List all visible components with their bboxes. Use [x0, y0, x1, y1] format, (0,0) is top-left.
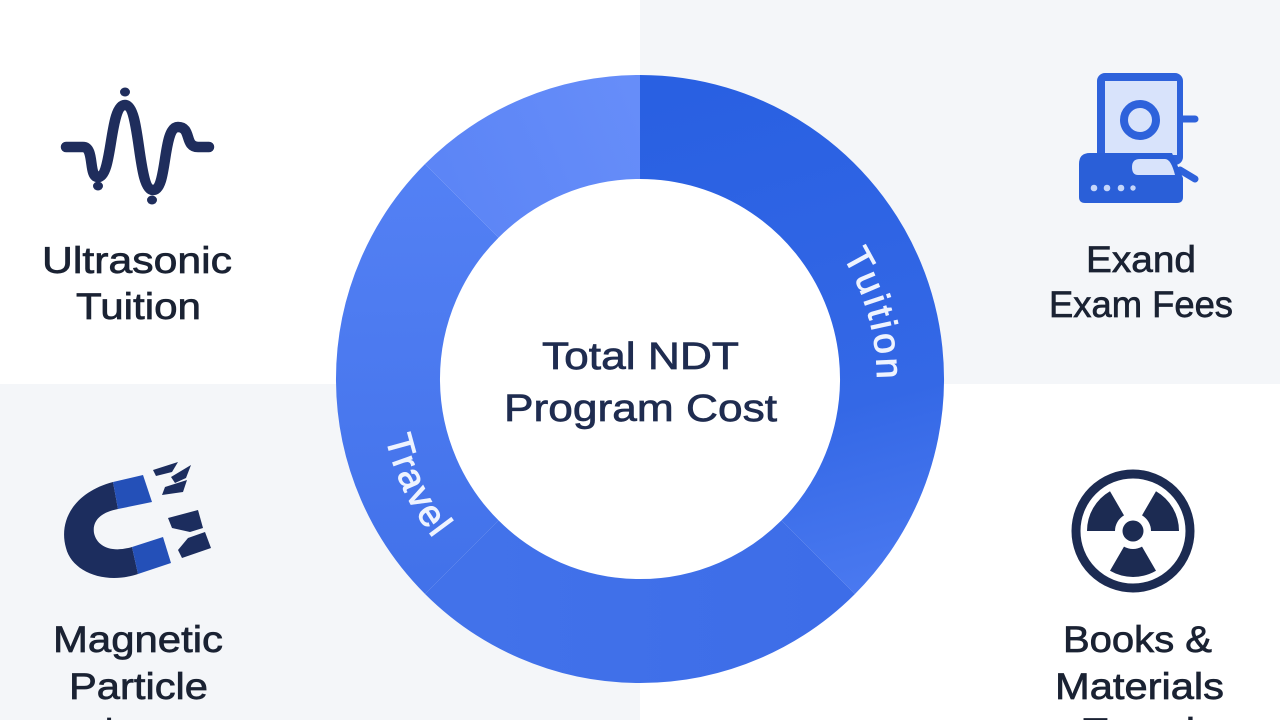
label: Ultrasonic Tuition	[42, 240, 232, 327]
segment: travel	[388, 201, 462, 557]
center title: Program Cost	[504, 388, 778, 430]
label: Exand Exam Fees: Exand	[1086, 239, 1196, 280]
donut label: Tuition: Tuition	[846, 244, 898, 377]
label: Books & Materials Travel: Books &	[1063, 619, 1212, 660]
label: Books & Materials Travel	[1055, 619, 1224, 720]
segment: top left	[462, 127, 640, 201]
label: Ultrasonic Tuition: Ultrasonic	[42, 240, 232, 281]
label: Books & Materials Travel: Materials	[1055, 666, 1224, 707]
label: Ultrasonic Tuition: Tuition	[76, 286, 201, 327]
icon: exam device	[1079, 73, 1195, 203]
segment: bottom	[462, 557, 818, 631]
icon: radiation symbol	[1076, 474, 1190, 588]
icon: magnet	[64, 462, 211, 578]
icon: ultrasonic wave	[66, 88, 209, 204]
center title: Total NDT	[542, 336, 739, 378]
center title	[504, 336, 778, 430]
label: Magnetic Particle: Particle	[69, 666, 208, 707]
label: Exand Exam Fees: Exam Fees	[1049, 284, 1233, 325]
segment: center hole	[440, 179, 840, 579]
label: Exand Exam Fees	[1049, 239, 1233, 325]
label: Magnetic Particle: Magnetic	[53, 619, 223, 660]
label: Magnetic Particle	[53, 619, 223, 720]
donut chart	[388, 127, 892, 631]
donut label: Travel: Travel	[387, 431, 454, 537]
segment: tuition	[640, 127, 892, 557]
